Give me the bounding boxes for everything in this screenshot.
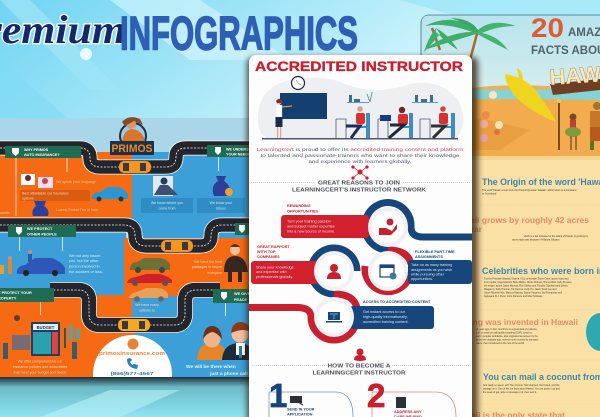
step 2: address any care: ADDRESS ANY — [394, 410, 422, 414]
title: Premium Infographics — [0, 6, 358, 60]
sign 4: protect other people: WE PROTECT — [27, 227, 53, 231]
reason 3: flexible part-time — [368, 250, 472, 291]
intro text: and experience with learners globally. — [308, 159, 412, 164]
reason 1: rewarding opportunities: REWARDING — [287, 204, 311, 208]
fact headings and copy — [440, 177, 600, 417]
panel base — [421, 15, 600, 417]
sign 3 and agent — [224, 223, 252, 282]
reason 3: flexible part-time: opportunities. — [411, 277, 433, 281]
reasons: language, options, broker fee: We speak your language — [56, 180, 96, 184]
sign 5: protect your property — [0, 288, 54, 315]
fleet of cars — [127, 258, 172, 302]
protect text: the accident or loss. — [69, 270, 103, 274]
fact: celebrities: Jason Michelle Wie, Marcus Mariota, Shane Victorino, Sid Fernandez and — [484, 292, 563, 294]
dotted separators — [478, 205, 600, 404]
reason 1: rewarding opportunities: and subject matter expertise — [287, 224, 335, 228]
reasons: language, options, broker fee: words — [0, 211, 10, 215]
understanding tiles — [141, 176, 245, 213]
fact: surfing invented: of years ago, in fact. And there is a good deal of evidence — [476, 328, 538, 331]
flower lei — [480, 91, 503, 142]
step 1: send application: SEND IN YOUR — [287, 408, 315, 412]
reason 1: rewarding opportunities: OPPORTUNITIES — [287, 210, 318, 214]
step 1: send application — [269, 377, 353, 417]
sign 6: peace of mind: WE GIVE — [234, 292, 251, 296]
panel background zones — [0, 118, 252, 377]
fleet text: options to — [139, 308, 155, 312]
sign 1: why Primos: WHY PRIMOS — [24, 148, 49, 152]
reason 3: flexible part-time: ASSIGNMENTS — [415, 255, 443, 259]
property text: that meet your budget and needs — [14, 370, 67, 374]
sign 4: protect other people: OTHER PEOPLE — [27, 232, 57, 236]
fact: mail a coconut — [483, 372, 600, 394]
beach scene — [422, 16, 600, 160]
fact: celebrities: from media, singers/actors Bette Midler, Nicole Kidman, Bruno Mars, Kelly Preston, — [484, 281, 572, 284]
fact: grows 42 acres: Hawaii grows by roughly 42 acres — [452, 215, 589, 225]
winding road — [0, 148, 252, 325]
closing text — [186, 364, 248, 377]
fact: origin of the word: or 'Homeland'. — [482, 192, 498, 196]
reason 2: great rapport: COMPANIES — [257, 255, 280, 259]
section heading: how to become: LEARNINGCERT INSTRUCTOR — [312, 370, 406, 376]
palm trees — [424, 18, 516, 60]
section heading: great reasons — [251, 180, 470, 194]
intro text — [256, 147, 464, 164]
intro text: LearningCert is proud to offer its accredited training content and platform — [256, 147, 464, 152]
budget calculator: BUDGET — [37, 325, 55, 330]
icon: person — [354, 348, 366, 361]
support agents — [197, 322, 254, 360]
panel: accredited instructor infographic — [247, 55, 478, 417]
fact: mail a coconut: the week of get, write a message on it, then sent it. — [483, 391, 537, 394]
reason 2: great rapport: Share your knowledge — [256, 266, 294, 270]
fact: celebrities: Agbayani, B.J. Penn, John Florence and Max Holloway. — [484, 295, 543, 298]
fact: grows 42 acres — [440, 215, 589, 242]
section heading: how to become: HOW TO BECOME A — [328, 364, 391, 370]
sign 1: why Primos — [5, 146, 81, 176]
fact: origin of the word: The word 'Hawaii' occurs from the Proto-Polynesian 'hawaiki', which refers to a homeland — [482, 189, 577, 192]
fact: surfing invented: at the late decades ago, revived more recently by top wave — [476, 338, 539, 342]
protect text: We not only insure — [69, 254, 100, 258]
fact: grows 42 acres: acres each year because of Kilauea Volcano. — [512, 238, 560, 242]
reason 3: flexible part-time: assignments as you wish — [411, 268, 452, 272]
step 1: send application: APPLICATION — [287, 412, 313, 416]
reason 2: great rapport: professionals globally. — [256, 275, 293, 279]
protect text — [69, 254, 103, 274]
fact: surfing invented: Surfing was invented in Hawaii — [453, 317, 578, 327]
panel shadow — [247, 57, 478, 417]
fact: surfing invented: riders, then introduced to the rest of the world. — [476, 342, 525, 345]
fact: celebrities: the singer, actors Jason Momoa, Ron Shirley and Timothy Olyphant and others, — [484, 284, 568, 288]
contact dome — [93, 335, 172, 377]
surfboards — [505, 68, 556, 122]
property text: We offer comprehensive car — [18, 360, 63, 364]
word: INFOGRAPHICS: INFOGRAPHICS — [120, 6, 358, 60]
understanding tiles: We know your — [210, 201, 233, 205]
fleet text: We have the best — [194, 260, 222, 264]
sign 1: why Primos: AUTO INSURANCE? — [24, 153, 60, 157]
reason 4: access to accredited content — [314, 297, 434, 337]
heading: accredited instructor: ACCREDITED INSTRUCTOR — [255, 58, 463, 74]
step 2: address any care: 2 — [367, 377, 385, 414]
protect text: person involved in — [69, 264, 100, 268]
fact: mail a coconut: And really so sweet, eh? The coconut, first wrapped, first boxed, and the — [483, 384, 560, 387]
fact: mail a coconut: postage on it. One of the fun facts about Hawaii. You can pretty it up and — [483, 388, 560, 390]
tiki torch and hula dancers — [557, 99, 600, 150]
ribbon path connecting reasons — [249, 203, 472, 340]
reason 1: rewarding opportunities: into a new source of income. — [287, 230, 335, 234]
panel: 20 amazing facts about Hawaii — [421, 13, 600, 417]
sign 6: peace of mind: PEACE — [234, 298, 248, 302]
sign 2: we understand: YOUR NEEDS — [226, 152, 251, 156]
Primos logo: PRIMOS — [112, 143, 152, 155]
fact: surfing invented — [453, 313, 600, 351]
classroom illustration — [258, 76, 463, 140]
fleet text: We have many — [135, 303, 159, 307]
reason 2: great rapport: GREAT RAPPORT — [257, 245, 290, 249]
heading: 20 amazing facts: 20 — [531, 13, 564, 43]
badge circle — [586, 313, 600, 351]
fact: celebrities — [482, 266, 600, 298]
panel card — [249, 55, 472, 417]
contact dome: (866)577-4667 — [110, 371, 154, 377]
closing text: just a phone call — [209, 371, 248, 377]
section heading: great reasons: GREAT REASONS TO JOIN — [318, 180, 400, 186]
fact: celebrities: Maggie Q, Kelly Preston, Tia Carrere, Kelly Hu, Jason Scott Lee and — [484, 288, 557, 291]
reasons: language, options, broker fee — [0, 174, 128, 216]
section heading: how to become — [252, 364, 470, 376]
fact: celebrities: Former President Barack Obama, AOL co-founder Steve Case, sports stars and — [484, 278, 569, 280]
understanding tiles: come from — [159, 206, 175, 210]
sign 6: peace of mind — [213, 289, 252, 316]
property text: insurance policies and deductibles — [13, 365, 68, 369]
icon: network — [352, 166, 368, 179]
reason 4: access to accredited content: high-quality internationally- — [363, 315, 409, 319]
reason 4: access to accredited content: Get instant access to our — [363, 310, 406, 314]
reasons: language, options, broker fee: Best affordable car insurance — [22, 192, 69, 196]
reason 1: rewarding opportunities — [281, 204, 408, 247]
reason 4: access to accredited content: ACCESS TO ACCREDITED CONTENT — [363, 300, 431, 304]
property text — [13, 360, 68, 374]
fact: surfing invented: and in popular worldwide, also originated as sixteen by the — [476, 335, 539, 338]
fact: grows 42 acres: which is a fair increase for the island of Hawaii, is growing by — [524, 235, 589, 238]
step 1: send application: 1 — [269, 377, 287, 414]
road cars — [118, 161, 193, 331]
closing text: We will be there when — [186, 364, 236, 370]
budget calculator — [3, 315, 80, 359]
intro text: to talented and passionate trainers who want to share their knowledge — [260, 153, 460, 158]
sign 2: we understand — [207, 145, 259, 171]
section heading: great reasons: LEARNINGCERT'S INSTRUCTOR NETWORK — [292, 188, 426, 194]
protect text: you, but the other — [69, 259, 99, 263]
fleet text — [135, 260, 222, 312]
reason 2: great rapport: and expertise with — [256, 270, 287, 274]
reason 3: flexible part-time: while pursuing other — [411, 272, 445, 276]
reason 3: flexible part-time: Take on as many training — [411, 263, 452, 267]
panel: Primos auto insurance infographic — [0, 117, 259, 377]
understanding tiles: issues — [216, 206, 226, 210]
reason 1: rewarding opportunities: Turn your training passion — [287, 220, 331, 224]
sign 4: protect other people — [8, 225, 76, 251]
understanding tiles: We know where you — [151, 201, 183, 205]
fact: origin of the word — [482, 177, 600, 196]
sign 2: we understand: WE UNDERSTAND — [226, 148, 259, 152]
reason 2: great rapport — [251, 245, 354, 291]
fleet text: everyone — [207, 271, 222, 275]
fact: grows 42 acres: every year — [440, 224, 483, 234]
reason 2: great rapport: WITH TOP — [257, 250, 276, 254]
fleet text: packages to insure — [192, 265, 222, 269]
Primos logo — [110, 117, 154, 155]
insured car with people — [0, 250, 65, 276]
contact dome: primosinsurance.com — [99, 351, 165, 357]
reason 3: flexible part-time: FLEXIBLE PART-TIME — [415, 250, 455, 254]
step 2: address any care — [367, 377, 456, 417]
reasons: language, options, broker fee: Lowest Broker Fee in town — [56, 208, 99, 212]
heading: 20 amazing facts — [531, 13, 600, 57]
reasons: language, options, broker fee: options — [22, 196, 34, 200]
fact: surfing invented: surf on what we call paddle boarding (SUP), which is — [476, 332, 533, 334]
reason 4: access to accredited content: accredited training content. — [363, 320, 409, 324]
